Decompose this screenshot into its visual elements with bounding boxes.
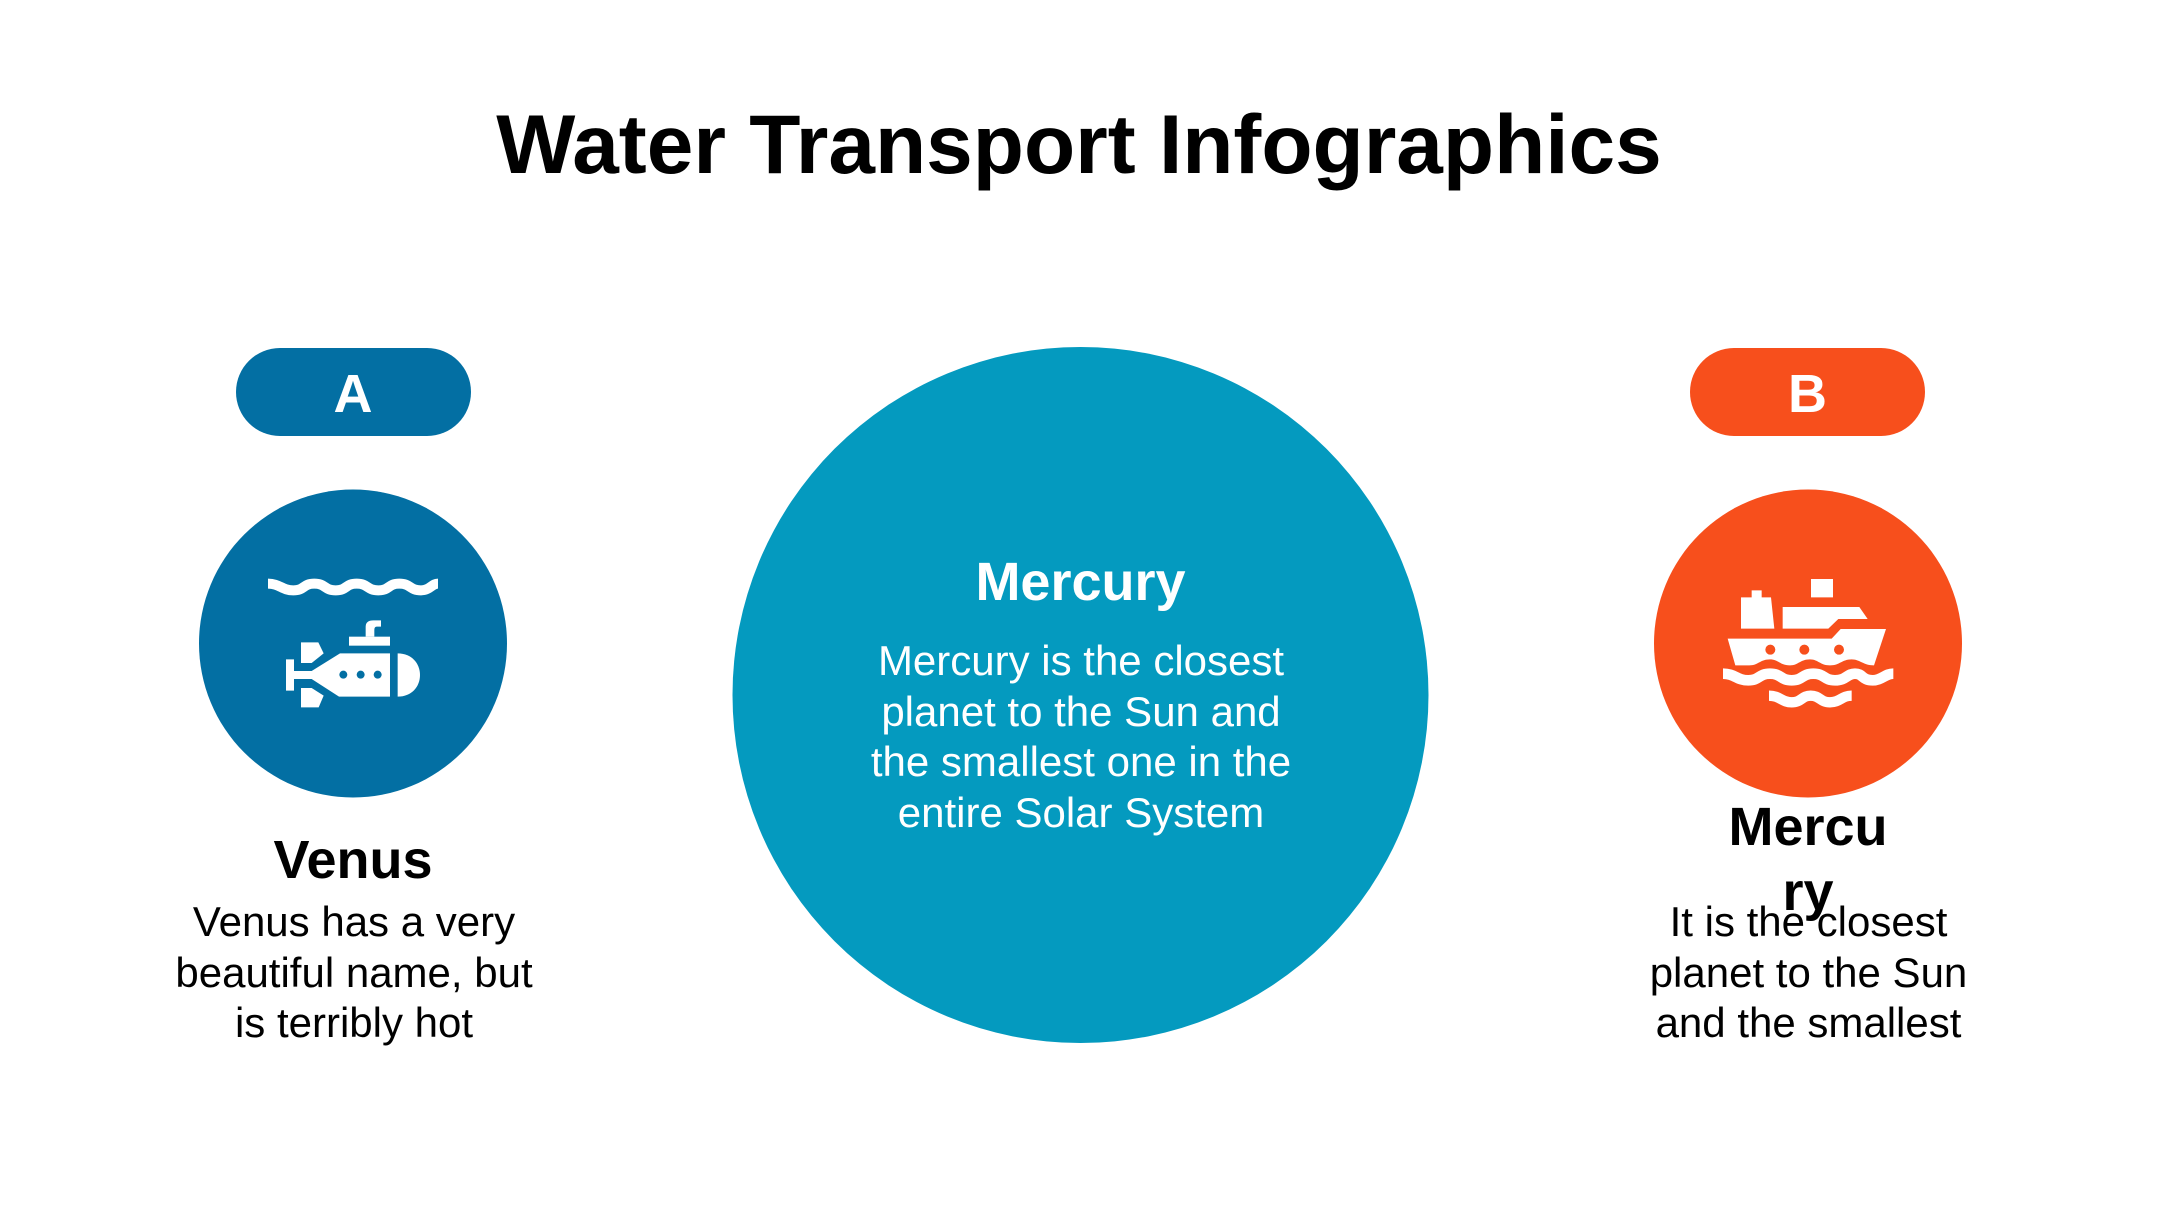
text: Venus description (175, 898, 533, 1046)
badge: B: B (1788, 364, 1827, 424)
center circle (732, 347, 1428, 1043)
panel: B Mercury (1650, 348, 1967, 1046)
text: Mercury side description: and the smallest (1656, 999, 1962, 1046)
text: Mercury description: entire Solar System (898, 789, 1264, 836)
panel: center Mercury (732, 347, 1428, 1043)
badge: B (1690, 348, 1925, 436)
text: Mercury description (871, 637, 1291, 836)
heading: Venus: Venus (273, 830, 433, 890)
heading: Mercury wrapped: ry (1782, 862, 1834, 922)
badge: A (236, 348, 471, 436)
heading: Mercury wrapped (1728, 797, 1888, 922)
text: Mercury description: Mercury is the closest (878, 637, 1284, 684)
text: Venus description: Venus has a very (193, 898, 515, 945)
panel: A Venus (175, 348, 533, 1046)
text: Venus description: is terribly hot (235, 999, 473, 1046)
text: Venus description: beautiful name, but (175, 949, 533, 996)
text: Mercury description: planet to the Sun and (881, 688, 1281, 735)
text: Mercury side description (1650, 898, 1967, 1046)
text: Mercury side description: It is the closest (1670, 898, 1948, 945)
icon: ship on waves (1654, 490, 1962, 798)
text: Mercury description: the smallest one in the (871, 738, 1291, 785)
badge: A: A (334, 364, 372, 424)
text: Mercury side description: planet to the Sun (1650, 949, 1967, 996)
heading: Mercury wrapped: Mercu (1728, 797, 1888, 857)
icon: submarine under water (199, 490, 507, 798)
title: Water Transport Infographics (496, 97, 1662, 191)
heading: Mercury: Mercury (975, 552, 1186, 612)
